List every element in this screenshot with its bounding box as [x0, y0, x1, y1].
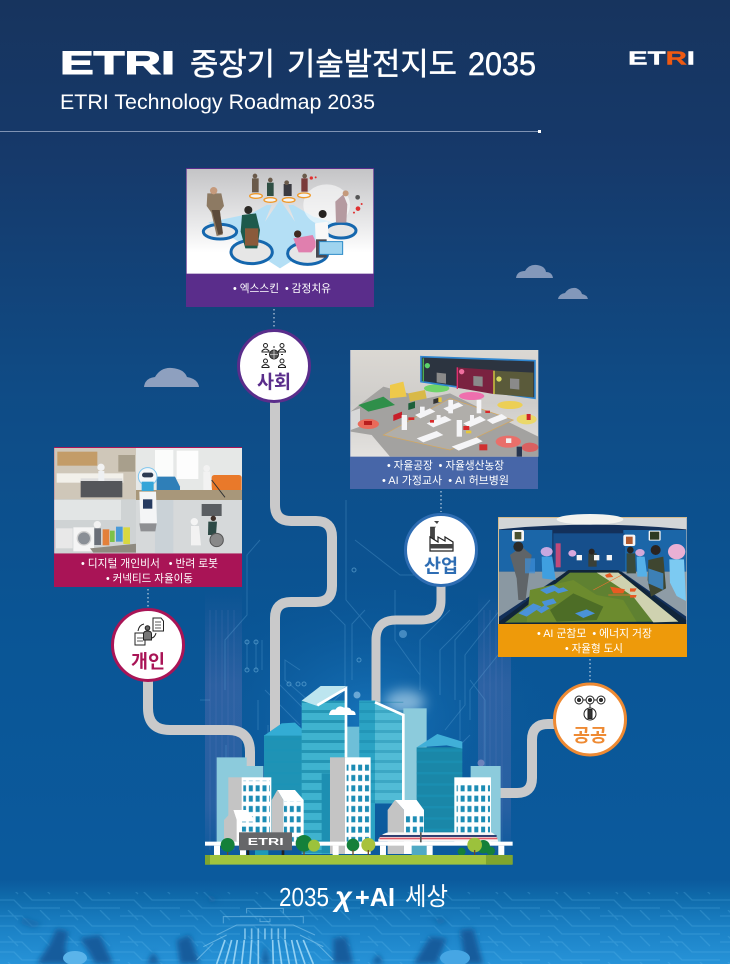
- icon: people and brain: [262, 344, 286, 368]
- cloud: left: [144, 368, 199, 387]
- subtitle: ETRI Technology Roadmap 2035: [60, 91, 375, 114]
- heading: 2035: [468, 46, 536, 82]
- node: personal: [112, 610, 184, 680]
- ETRI wordmark: ETRI: [60, 45, 175, 81]
- connector: public path: [498, 724, 560, 793]
- dotted link: industry: [440, 491, 442, 512]
- robots: [94, 464, 225, 547]
- ground: [205, 855, 513, 865]
- public illustration: [498, 514, 687, 624]
- label: 사회: [257, 372, 291, 392]
- industry illustration: [350, 350, 538, 457]
- back buildings: [217, 708, 501, 843]
- panel: personal: [54, 447, 242, 587]
- title block: [60, 45, 536, 114]
- divider line with end dot: [0, 130, 541, 133]
- cloud: right small: [558, 288, 588, 299]
- caption: 2035 x+AI world: +AI: [355, 882, 395, 912]
- trees: [221, 835, 495, 856]
- dotted link: society: [273, 309, 275, 328]
- personal caption: • 커넥티드 자율이동: [106, 572, 193, 585]
- dotted link: personal: [147, 589, 149, 607]
- city illustration: [205, 686, 513, 865]
- tower: right teal: [417, 734, 462, 843]
- caption: 2035 x+AI world: [279, 881, 448, 912]
- cloud: upper right: [516, 265, 553, 278]
- public caption: • AI 군참모 • 에너지 거장: [537, 627, 652, 640]
- caption: 2035 x+AI world: 2035: [279, 882, 329, 912]
- caption: 2035 x+AI world: χ: [332, 881, 353, 912]
- node: society: [238, 330, 310, 402]
- node: public: [554, 684, 626, 755]
- label: 공공: [573, 725, 607, 746]
- panel: public: [498, 514, 687, 657]
- label: 개인: [131, 651, 165, 672]
- heading: 기술발전지도: [287, 47, 457, 82]
- ETRI sign: [239, 832, 292, 855]
- elevated road: [205, 842, 513, 855]
- personal illustration: [54, 448, 242, 553]
- bottom circuit glow: [0, 880, 730, 964]
- industry caption: [382, 459, 509, 487]
- connector: industry path: [376, 580, 441, 725]
- tower: left teal: [264, 723, 309, 843]
- industry caption: • 자율공장 • 자율생산농장: [387, 459, 504, 472]
- industry caption: • AI 가정교사 • AI 허브병원: [382, 474, 509, 487]
- tower: right: [359, 701, 403, 843]
- small ETRI logo: ET R I: [628, 48, 695, 68]
- society caption: • 엑스스킨 • 감정치유: [233, 282, 331, 295]
- icon: network: [575, 696, 605, 720]
- public caption: • 자율형 도시: [565, 642, 623, 655]
- ETRI sign: ETRI: [248, 837, 284, 848]
- heading: [190, 46, 536, 82]
- heading: 중장기: [190, 47, 275, 82]
- connector: personal path: [148, 675, 250, 775]
- icon: factory: [430, 521, 453, 551]
- icon: person with documents: [135, 618, 164, 645]
- node: industry: [406, 514, 476, 586]
- panel: industry: [350, 350, 538, 489]
- connector: society path: [275, 395, 332, 740]
- tower: centre: [302, 686, 356, 854]
- public caption: [537, 627, 652, 655]
- personal caption: • 디지털 개인비서 • 반려 로봇: [81, 557, 218, 570]
- dotted link: public: [589, 659, 591, 682]
- white buildings: [224, 757, 491, 855]
- label: 산업: [424, 556, 458, 576]
- train: [378, 832, 498, 842]
- caption: 2035 x+AI world: 세상: [405, 883, 448, 911]
- personal caption: [81, 557, 218, 585]
- panel: society: [186, 168, 374, 307]
- society illustration: [187, 169, 373, 274]
